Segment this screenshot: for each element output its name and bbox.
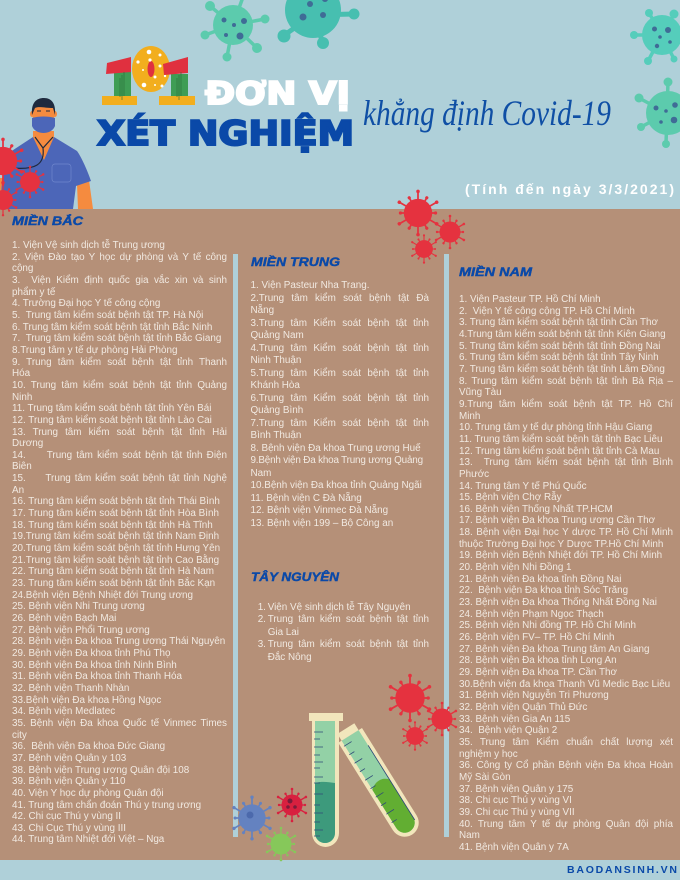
list: Miền Nam: Nam xyxy=(459,830,480,841)
list: Miền Bắc: 38. Bệnh viện Trung ương Quân đội 108 xyxy=(12,765,189,776)
list: Miền Trung: 4.Trung tâm Kiểm soát bệnh tật tỉnh xyxy=(250,342,429,354)
list: Tây Nguyên xyxy=(258,601,429,662)
icon: teal virus top xyxy=(278,0,360,49)
list: Miền Bắc: 10. Trung tâm kiểm soát bệnh tật tỉnh Quảng xyxy=(12,380,227,391)
list: Miền Nam: 36. Công ty Cổ phần Bệnh viện Đa khoa Hoàn xyxy=(459,760,673,771)
list: Miền Bắc: 24.Bệnh viện Bệnh Nhiệt đới Trung ương xyxy=(12,590,193,601)
list: Miền Nam: 8. Trung tâm kiểm soát bệnh tật tỉnh Bà Rịa – xyxy=(459,376,673,387)
icon: green virus right xyxy=(634,78,680,148)
list: Miền Nam: 38. Chi cục Thú y vùng VI xyxy=(459,795,572,806)
list: Tây Nguyên: Viện Vệ sinh dịch tễ Tây Nguyên xyxy=(268,602,411,612)
list: Tây Nguyên: Đắc Nông xyxy=(268,652,312,662)
list: Miền Bắc: 42. Chi cục Thú y vùng II xyxy=(12,811,121,822)
list: Miền Bắc: 32. Bệnh viện Thanh Nhàn xyxy=(12,683,129,694)
title: khẳng định Covid-19: khẳng định Covid-19 xyxy=(363,93,611,133)
icon: green virus small xyxy=(265,827,297,861)
list: Miền Nam: 4.Trung tâm kiểm soát bệnh tật tỉnh Kiên Giang xyxy=(459,329,666,340)
list: Miền Trung: 6.Trung tâm Kiểm soát bệnh tật tỉnh xyxy=(250,392,429,404)
list: Miền Bắc: 33.Bệnh viện Đa khoa Hồng Ngọc xyxy=(12,695,161,706)
list: Miền Bắc: 44. Trung tâm Nhiệt đới Việt – Nga xyxy=(12,834,164,845)
icon: teal virus right top xyxy=(630,9,680,65)
list: Miền Trung: 12. Bệnh viện Vinmec Đà Nẵng xyxy=(250,505,388,516)
list: Miền Bắc: 29. Bệnh viện Đa khoa tỉnh Phú Thọ xyxy=(12,648,170,659)
text: 3. xyxy=(258,639,266,650)
list: Miền Bắc: 28. Bệnh viện Đa khoa Trung ương Thái Nguyên xyxy=(12,636,225,647)
list: Miền Nam: 25. Bệnh viện Nhi đồng TP. Hồ Chí Minh xyxy=(459,620,636,631)
list: Miền Nam: 23. Bệnh viện Đa khoa Thống Nhất Đồng Nai xyxy=(459,597,657,608)
list: Miền Bắc: 13. Trung tâm kiểm soát bệnh tật tỉnh Hải xyxy=(12,426,227,438)
list: Miền Bắc: 12. Trung tâm kiểm soát bệnh tật tỉnh Lào Cai xyxy=(12,415,212,426)
list: Miền Bắc xyxy=(12,239,227,845)
list: Miền Bắc: 27. Bệnh viện Phổi Trung ương xyxy=(12,625,150,636)
text: 1. xyxy=(258,602,266,612)
icon: test tube upright xyxy=(309,713,343,847)
list: Miền Bắc: 21.Trung tâm kiểm soát bệnh tật tỉnh Cao Bằng xyxy=(12,555,219,566)
list: Miền Bắc: 31. Bệnh viện Đa khoa tỉnh Thanh Hóa xyxy=(12,671,182,682)
list: Miền Bắc: 23. Trung tâm kiểm soát bệnh tật tỉnh Bắc Kạn xyxy=(12,578,215,589)
list: Miền Nam: 30.Bệnh viện đa khoa Thanh Vũ Medic Bạc Liêu xyxy=(459,679,670,690)
list: Miền Bắc: Biên xyxy=(12,461,32,472)
list: Miền Nam: 32. Bệnh viện Quận Thủ Đức xyxy=(459,702,587,713)
list: Miền Bắc: 25. Bệnh viện Nhi Trung ương xyxy=(12,601,145,612)
list: Miền Bắc: 3. Viện Kiểm định quốc gia vắc xin và sinh xyxy=(12,275,227,286)
list: Miền Nam: 28. Bệnh viện Đa khoa tỉnh Long An xyxy=(459,655,617,666)
list: Miền Bắc: 4. Trường Đại học Y tế công cộng xyxy=(12,298,160,309)
title: XÉT NGHIỆM: XÉT NGHIỆM xyxy=(97,113,354,154)
heading: MIỀN NAM: MIỀN NAM xyxy=(459,264,533,279)
heading: TÂY NGUYÊN: TÂY NGUYÊN xyxy=(251,569,339,584)
list: Tây Nguyên: Gia Lai xyxy=(268,626,299,638)
list: Miền Nam: 27. Bệnh viện Đa khoa Trung tâm An Giang xyxy=(459,644,650,655)
list: Miền Nam: 37. Bệnh viện Quân y 175 xyxy=(459,784,573,795)
list: Miền Nam: 33. Bệnh viện Gia An 115 xyxy=(459,714,570,725)
list: Miền Bắc: 8.Trung tâm y tế dự phòng Hải Phòng xyxy=(12,345,177,356)
list: Miền Bắc: 43. Chi Cục Thú y vùng III xyxy=(12,823,126,834)
list: Miền Trung: Bình Thuận xyxy=(250,430,301,441)
list: Miền Nam: 21. Bệnh viện Đa khoa tỉnh Đồng Nai xyxy=(459,574,622,585)
list: Miền Nam: thuộc Trường Đại học Y Dược TP.Hồ Chí Minh xyxy=(459,539,663,550)
list: Miền Nam: 26. Bệnh viện FV– TP. Hồ Chí Minh xyxy=(459,632,615,643)
list: Miền Bắc: 20.Trung tâm kiểm soát bệnh tật tỉnh Hưng Yên xyxy=(12,543,220,554)
list: Miền Nam: Mỹ Sài Gòn xyxy=(459,772,511,783)
list: Tây Nguyên: Trung tâm kiểm soát bệnh tật tỉnh xyxy=(268,639,429,650)
list: Miền Bắc: 6. Trung tâm kiểm soát bệnh tật tỉnh Bắc Ninh xyxy=(12,322,212,333)
list: Miền Bắc: 17. Trung tâm kiểm soát bệnh tật tỉnh Hòa Bình xyxy=(12,508,219,519)
list: Miền Bắc: 9. Trung tâm kiểm soát bệnh tật tỉnh Thanh xyxy=(12,357,227,368)
icon: dark red virus xyxy=(276,788,308,822)
divider bar right xyxy=(444,254,449,837)
list: Miền Bắc: Hóa xyxy=(12,368,30,379)
list: Miền Bắc: 40. Viện Y học dự phòng Quân đội xyxy=(12,788,164,799)
list: Miền Nam: 41. Bệnh viện Quân y 7A xyxy=(459,842,569,853)
list: Miền Bắc: 11. Trung tâm kiểm soát bệnh tật tỉnh Yên Bái xyxy=(12,403,211,414)
list: Miền Nam: Phước xyxy=(459,469,489,480)
list: Miền Nam: 12. Trung tâm kiểm soát bệnh tật tỉnh Cà Mau xyxy=(459,446,659,457)
list: Miền Bắc: 19.Trung tâm kiểm soát bệnh tật tỉnh Nam Định xyxy=(12,531,219,542)
icon: green virus top xyxy=(200,0,270,62)
list: Miền Trung: Nẵng xyxy=(250,305,274,316)
list: Miền Bắc: 37. Bệnh viện Quân y 103 xyxy=(12,753,126,764)
list: Miền Nam: 35. Trung tâm Kiểm chuẩn chất lượng xét xyxy=(459,737,673,748)
list: Miền Trung: Ninh Thuận xyxy=(250,355,301,366)
list: Miền Bắc: cộng xyxy=(12,263,33,274)
list: Miền Nam: 22. Bệnh viện Đa khoa tỉnh Sóc Trăng xyxy=(459,585,628,596)
icon: number 101 xyxy=(102,46,195,105)
list: Miền Nam: 7. Trung tâm kiểm soát bệnh tật tỉnh Lâm Đồng xyxy=(459,364,665,375)
list: Miền Nam: 3. Trung tâm kiểm soát bệnh tật tỉnh Cần Thơ xyxy=(459,317,658,328)
list: Miền Nam: 24. Bệnh viện Phạm Ngọc Thạch xyxy=(459,609,604,620)
list: Miền Bắc: 5. Trung tâm kiểm soát bệnh tật TP. Hà Nội xyxy=(12,310,203,321)
icon: doctor xyxy=(0,98,93,209)
list: Miền Bắc: 39. Bệnh viện Quân y 110 xyxy=(12,776,125,787)
list: Miền Trung: 7.Trung tâm Kiểm soát bệnh tật tỉnh xyxy=(250,418,429,428)
list: Miền Trung: 1. Viện Pasteur Nha Trang. xyxy=(250,280,369,291)
list: Miền Nam: 31. Bệnh viện Nguyễn Tri Phương xyxy=(459,690,609,701)
list: Miền Bắc: 14. Trung tâm kiểm soát bệnh tật tỉnh Điện xyxy=(12,450,227,461)
list: Miền Trung: 3.Trung tâm Kiểm soát bệnh tật tỉnh xyxy=(250,318,429,328)
list: Miền Trung: Nam xyxy=(250,468,271,478)
list: Miền Nam: 5. Trung tâm kiểm soát bệnh tật tỉnh Đồng Nai xyxy=(459,341,660,352)
list: Miền Nam: 6. Trung tâm kiểm soát bệnh tật tỉnh Tây Ninh xyxy=(459,352,659,363)
list: Miền Bắc: Ninh xyxy=(12,392,32,403)
list: Miền Bắc: 34. Bệnh viện Medlatec xyxy=(12,706,115,717)
list: Miền Bắc: 35. Bệnh viện Đa khoa Quốc tế Vinmec Times xyxy=(12,718,227,729)
list: Miền Nam: 20. Bệnh viện Nhi Đồng 1 xyxy=(459,562,572,573)
list: Miền Bắc: phẩm y tế xyxy=(12,287,55,298)
heading: MIỀN BẮC: MIỀN BẮC xyxy=(12,213,83,228)
list: Miền Bắc: 16. Trung tâm kiểm soát bệnh tật tỉnh Thái Bình xyxy=(12,496,220,507)
heading: MIỀN TRUNG: MIỀN TRUNG xyxy=(251,254,340,269)
list: Miền Trung: Quảng Bình xyxy=(250,405,303,416)
list: Miền Nam: 39. Chi cục Thú y vùng VII xyxy=(459,807,575,818)
list: Miền Nam: 9.Trung tâm kiểm soát bệnh tật TP. Hồ Chí xyxy=(459,399,673,410)
list: Miền Bắc: 7. Trung tâm kiểm soát bệnh tật tỉnh Bắc Giang xyxy=(12,333,221,344)
list: Miền Trung: 2.Trung tâm kiểm soát bệnh tật Đà xyxy=(250,292,429,304)
list: Miền Nam: 1. Viện Pasteur TP. Hồ Chí Minh xyxy=(459,294,601,305)
list: Miền Bắc: 26. Bệnh viện Bạch Mai xyxy=(12,613,116,624)
list: Miền Nam: 15. Bệnh viện Chợ Rẫy xyxy=(459,492,562,503)
list: Miền Nam: 29. Bệnh viện Đa khoa TP. Cần Thơ xyxy=(459,667,617,678)
list: Miền Trung: 10.Bệnh viện Đa khoa tỉnh Quảng Ngãi xyxy=(250,480,422,491)
list: Miền Nam: 40. Trung tâm Y tế dự phòng Quân đội phía xyxy=(459,819,673,830)
list: Miền Nam: 10. Trung tâm y tế dự phòng tỉnh Hậu Giang xyxy=(459,422,652,433)
list: Miền Bắc: Dương xyxy=(12,438,43,449)
divider bar left xyxy=(233,254,238,837)
icon: test tube tilted xyxy=(334,721,424,842)
list: Miền Trung: 11. Bệnh viện C Đà Nẵng xyxy=(250,492,362,504)
title: ĐƠN VỊ: ĐƠN VỊ xyxy=(205,76,350,112)
list: Miền Nam: 34. Bệnh viện Quận 2 xyxy=(459,725,557,736)
list: Miền Trung: Khánh Hòa xyxy=(250,380,300,391)
text: 2. xyxy=(258,614,266,625)
list: Miền Bắc: 1. Viện Vệ sinh dịch tễ Trung ương xyxy=(12,240,165,251)
list: Miền Bắc: 41. Trung tâm chẩn đoán Thú y trung ương xyxy=(12,800,201,810)
footer source: BAODANSINH.VN xyxy=(567,864,677,876)
list: Tây Nguyên: Trung tâm kiểm soát bệnh tật tỉnh xyxy=(268,614,429,625)
icon: red viruses above tubes xyxy=(388,674,458,751)
list: Miền Nam: 2. Viện Y tế công cộng TP. Hồ Chí Minh xyxy=(459,306,635,317)
list: Miền Bắc: 36. Bệnh viện Đa khoa Đức Giang xyxy=(12,741,165,752)
list: Miền Nam: Vũng Tàu xyxy=(459,387,502,398)
list: Miền Nam: 13. Trung tâm kiểm soát bệnh tật tỉnh Bình xyxy=(459,457,673,468)
list: Miền Bắc: 22. Trung tâm kiểm soát bệnh tật tỉnh Hà Nam xyxy=(12,566,214,577)
list: Miền Nam: nghiệm y học xyxy=(459,749,518,760)
list: Miền Nam: 19. Bệnh viện Bệnh Nhiệt đới TP. Hồ Chí Minh xyxy=(459,550,662,561)
list: Miền Trung xyxy=(250,280,429,528)
list: Miền Bắc: 30. Bệnh viện Đa khoa tỉnh Ninh Bình xyxy=(12,660,177,671)
icon: blue virus xyxy=(232,796,272,840)
list: Miền Trung: 8. Bệnh viện Đa khoa Trung ương Huế xyxy=(250,442,421,454)
list: Miền Bắc: 2. Viện Đào tạo Y học dự phòng và Y tế công xyxy=(12,252,227,263)
list: Miền Nam: 16. Bệnh viện Thống Nhất TP.HCM xyxy=(459,504,613,515)
icon: red viruses near doctor xyxy=(0,138,45,216)
list: Miền Nam: 14. Trung tâm Y tế Phú Quốc xyxy=(459,480,587,492)
list: Miền Nam: 18. Bệnh viện Đại học Y dược TP. Hồ Chí Minh xyxy=(459,527,673,538)
date note: (Tính đến ngày 3/3/2021) xyxy=(465,181,674,197)
list: Miền Bắc: city xyxy=(12,730,27,741)
list: Miền Trung: Quảng Nam xyxy=(250,330,304,341)
list: Miền Nam: 11. Trung tâm kiểm soát bệnh tật tỉnh Bạc Liêu xyxy=(459,434,662,445)
list: Miền Nam: 17. Bệnh viện Đa khoa Trung ương Cần Thơ xyxy=(459,515,655,526)
list: Miền Bắc: 18. Trung tâm kiểm soát bệnh tật tỉnh Hà Tĩnh xyxy=(12,520,213,531)
list: Miền Bắc: An xyxy=(12,485,24,496)
list: Miền Nam xyxy=(459,294,673,853)
icon: red viruses at panel edge xyxy=(397,190,466,264)
list: Miền Trung: 13. Bệnh viện 199 – Bộ Công an xyxy=(250,518,393,528)
list: Miền Bắc: 15. Trung tâm kiểm soát bệnh tật tỉnh Nghệ xyxy=(12,473,227,484)
panel: brown content background xyxy=(0,209,680,860)
list: Miền Nam: Minh xyxy=(459,411,480,422)
list: Miền Trung: 9.Bệnh viện Đa khoa Trung ương Quảng xyxy=(250,455,423,466)
list: Miền Trung: 5.Trung tâm Kiểm soát bệnh tật tỉnh xyxy=(250,368,429,378)
